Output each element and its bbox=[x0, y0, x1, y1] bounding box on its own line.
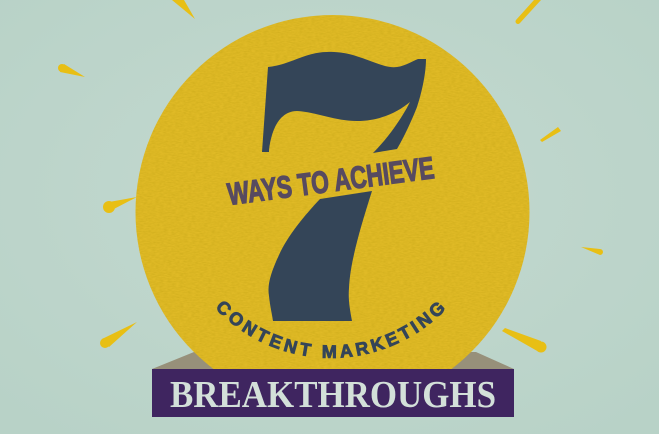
ray: upper right bbox=[540, 127, 561, 142]
ray: lower left bbox=[100, 322, 137, 348]
pedestal top bbox=[152, 352, 514, 369]
ray: lower right bbox=[502, 328, 546, 352]
ray: left bbox=[103, 197, 137, 213]
yellow disc bbox=[136, 15, 530, 369]
ray: top right bbox=[516, 0, 541, 24]
ray: top left bbox=[172, 0, 195, 19]
headline: content marketing: CONTENT MARKETING bbox=[217, 301, 444, 358]
sun rays bbox=[58, 0, 603, 352]
banner: breakthroughs: BREAKTHROUGHS bbox=[170, 374, 496, 416]
numeral 7 bbox=[262, 52, 426, 321]
numeral 7: stem bbox=[268, 191, 372, 321]
headline: ways to achieve: WAYS TO ACHIEVE bbox=[225, 150, 436, 212]
ray: upper left bbox=[58, 64, 85, 77]
numeral 7: top bbox=[262, 52, 426, 153]
ray: right bbox=[581, 247, 603, 255]
